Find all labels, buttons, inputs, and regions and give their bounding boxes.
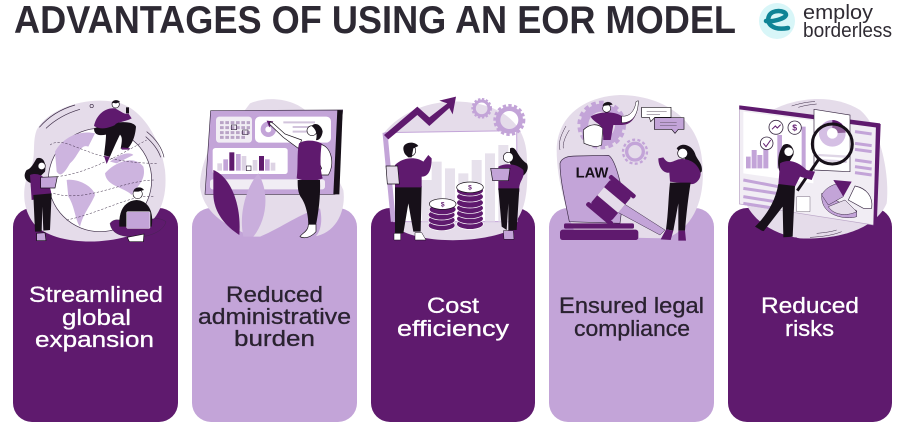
icon: growth chart with coins and two people: $ <box>468 185 472 192</box>
3D pie chart <box>822 193 857 218</box>
heading: streamlined global expansion: expansion <box>35 327 154 352</box>
panel: reduced risks <box>728 208 892 422</box>
heading: cost efficiency: Cost <box>427 293 479 318</box>
heading: reduced risks <box>761 293 859 341</box>
speech bubbles <box>642 107 671 122</box>
law book <box>560 155 623 223</box>
heading: reduced administrative burden <box>198 282 351 351</box>
heading: streamlined global expansion <box>29 282 163 352</box>
heading: reduced administrative burden: administrative <box>198 304 351 329</box>
heading: reduced risks: risks <box>785 316 834 341</box>
icon: law book, gavel and two people <box>557 95 703 241</box>
logo: employ borderless: employ <box>803 2 873 24</box>
heading: streamlined global expansion: Streamlined <box>29 282 163 307</box>
title: ADVANTAGES OF USING AN EOR MODEL <box>14 0 736 42</box>
woman with magnifier <box>778 144 794 175</box>
heading: ensured legal compliance: Ensured legal <box>559 293 704 318</box>
man with laptop <box>110 219 166 237</box>
growth arrow <box>384 97 456 139</box>
presenter <box>269 122 302 148</box>
leaves <box>213 170 240 235</box>
gears <box>474 101 489 116</box>
heading: reduced administrative burden: Reduced <box>226 282 323 307</box>
woman with tablet <box>510 148 528 177</box>
large gear with man <box>584 108 619 142</box>
small gear <box>627 143 643 160</box>
panel: cost efficiency <box>371 208 535 422</box>
woman pointing <box>677 145 702 177</box>
heading: ensured legal compliance <box>559 293 704 341</box>
icon: dashboard with presenter and leaves <box>200 99 344 240</box>
coin stacks <box>428 185 483 231</box>
heading: ensured legal compliance: compliance <box>574 316 690 341</box>
logo: employ borderless <box>759 2 892 42</box>
woman with tablet <box>25 158 45 183</box>
heading: reduced administrative burden: burden <box>234 326 315 351</box>
heading: cost efficiency <box>397 293 509 341</box>
heading: cost efficiency: efficiency <box>397 316 509 341</box>
panel: reduced administrative burden <box>192 208 357 422</box>
icon: report board with magnifier, pie chart and woman: $ <box>792 123 797 133</box>
panel: streamlined global expansion <box>13 208 178 422</box>
icon: growth chart with coins and two people <box>384 97 528 240</box>
icon: globe with three people <box>24 100 166 242</box>
logo: employ borderless: borderless <box>803 20 892 42</box>
gavel base <box>564 223 634 229</box>
panel: ensured legal compliance <box>549 208 714 422</box>
heading: reduced risks: Reduced <box>761 293 859 318</box>
report sheet with pie <box>814 109 850 172</box>
heading: streamlined global expansion: global <box>62 305 131 330</box>
icon: law book, gavel and two people: LAW <box>576 166 608 182</box>
man with clipboard <box>395 186 422 233</box>
icon: report board with magnifier, pie chart and woman <box>739 99 887 241</box>
icon: growth chart with coins and two people: $ <box>441 201 445 208</box>
sitting man with phone <box>94 122 136 157</box>
magnifier <box>812 124 852 164</box>
gavel <box>617 203 665 235</box>
